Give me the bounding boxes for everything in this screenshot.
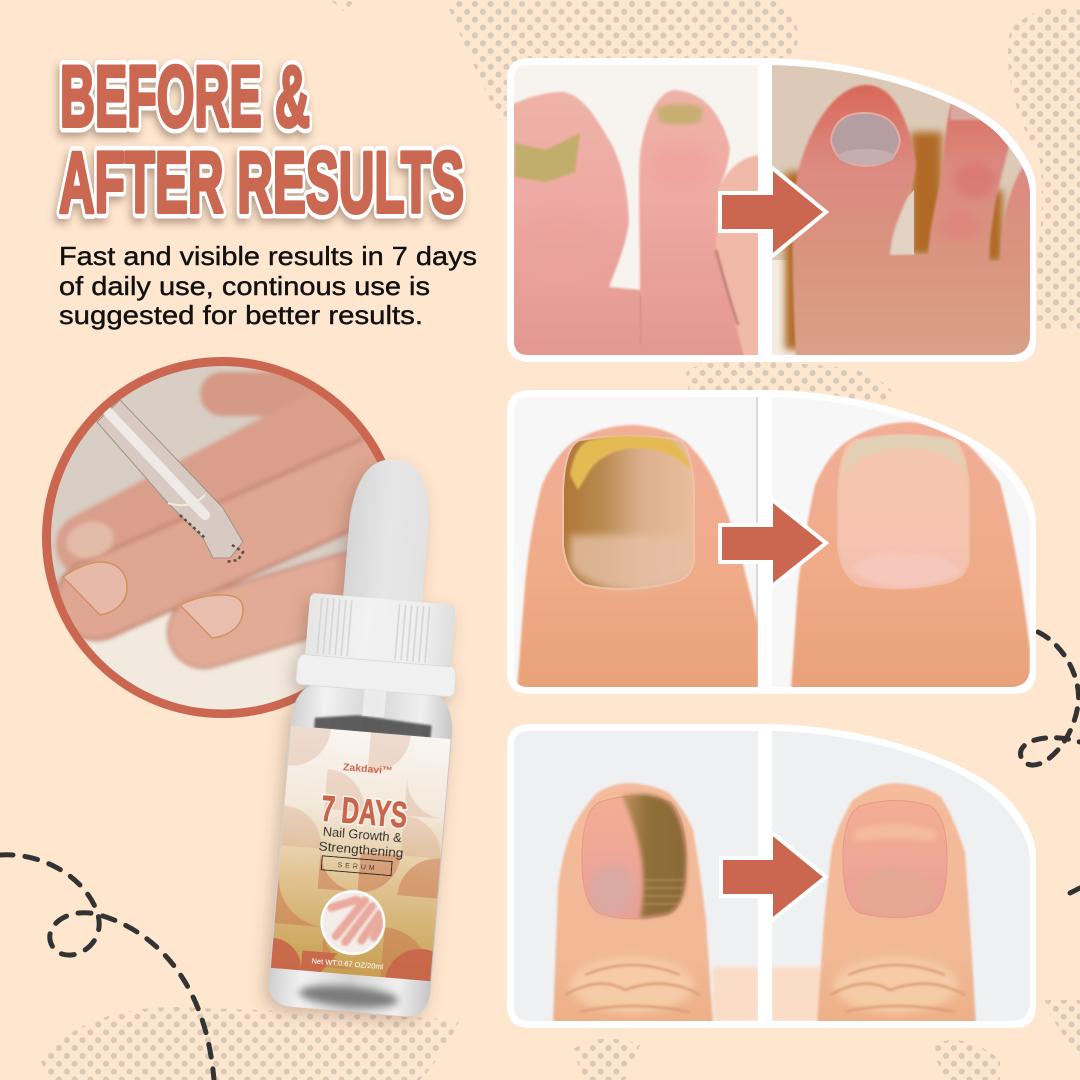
panel: yellow nail before and after	[507, 390, 1036, 694]
subtitle text: suggested for better results.	[59, 300, 423, 330]
bottle glass	[267, 684, 455, 1018]
net weight: Net WT:0.67 OZ/20ml	[311, 956, 384, 971]
title	[59, 49, 464, 231]
serum tag: SERUM	[337, 862, 378, 872]
7 days heading: 7 DAYS	[320, 788, 409, 836]
product name: Nail Growth &	[322, 824, 403, 845]
subtitle text: Fast and visible results in 7 days	[59, 241, 477, 271]
dropper cap	[296, 592, 462, 697]
title: AFTER RESULTS	[59, 135, 464, 231]
product name	[318, 824, 405, 861]
panel: dark nail before and after	[507, 724, 1036, 1028]
dashed line: lower left loop	[0, 855, 214, 1080]
subtitle text	[59, 241, 477, 330]
dropper tip	[97, 400, 243, 562]
product name: Strengthening	[318, 838, 404, 861]
hand badge	[320, 890, 386, 956]
panel: toes before and after	[505, 58, 1036, 362]
product bottle	[267, 453, 475, 1018]
title: BEFORE &	[60, 49, 310, 145]
title: BEFORE &	[60, 49, 310, 145]
dashed line: right loop	[1021, 632, 1080, 893]
brand name: Zakdavi™	[343, 761, 393, 777]
dropper bulb	[343, 456, 434, 606]
subtitle text: of daily use, continous use is	[59, 271, 430, 301]
circle photo: serum applied to fingers	[42, 357, 386, 718]
serum tag	[321, 856, 392, 876]
7 days heading	[320, 788, 409, 836]
label	[271, 726, 451, 981]
title: AFTER RESULTS	[59, 135, 464, 231]
7 days heading: 7 DAYS	[320, 788, 409, 836]
